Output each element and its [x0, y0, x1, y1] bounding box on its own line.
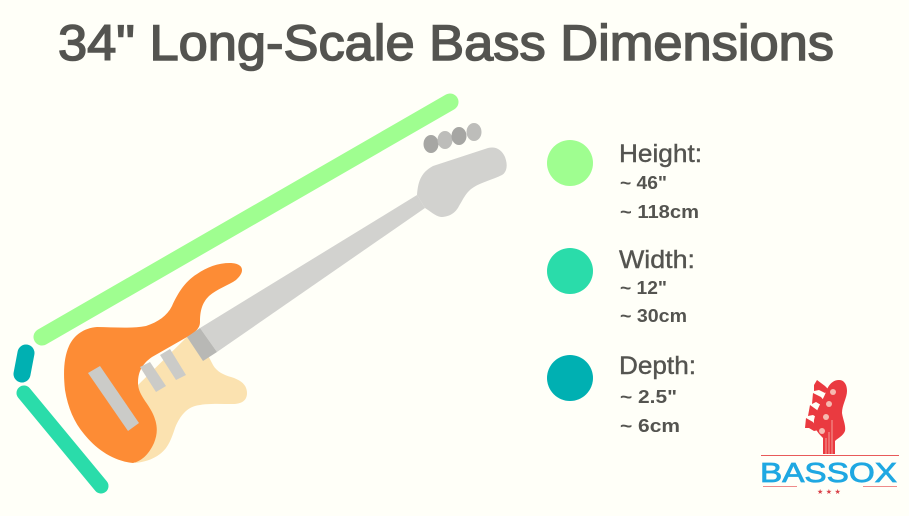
swatch [547, 355, 593, 401]
icon: bass guitar [64, 123, 507, 463]
label: Width: [619, 246, 695, 274]
tuning pegs [424, 123, 482, 153]
pickup 2 [160, 349, 186, 380]
logo headstock [814, 380, 847, 454]
label: Height: [619, 140, 702, 168]
legend: height [547, 140, 702, 222]
logo rule [761, 455, 899, 456]
neck joint [187, 328, 217, 361]
value inches: ~ 2.5" [620, 387, 677, 407]
legend: depth [547, 352, 696, 436]
value cm: ~ 6cm [620, 416, 680, 436]
value cm: ~ 30cm [620, 306, 687, 326]
value cm: ~ 118cm [620, 202, 699, 222]
pickup 3 [140, 362, 166, 392]
bar: width dimension [24, 393, 101, 486]
logo strings [826, 420, 832, 454]
logo tuners [805, 380, 829, 431]
swatch [547, 248, 593, 294]
orange body [64, 263, 242, 463]
neck [200, 195, 425, 352]
bar: depth dimension [22, 353, 26, 374]
logo lower rules [763, 486, 897, 488]
lower body [135, 337, 247, 463]
logo: Bassox [760, 380, 899, 496]
label: Depth: [619, 352, 696, 380]
logo wordmark: BASSOX [760, 457, 897, 488]
logo stars: ★★★ [817, 488, 843, 496]
value inches: ~ 46" [620, 173, 667, 193]
value inches: ~ 12" [620, 278, 667, 298]
legend: width [547, 246, 695, 326]
body pickup [88, 366, 139, 431]
swatch [547, 140, 593, 186]
logo pegs [819, 389, 836, 434]
title: 34" Long-Scale Bass Dimensions [58, 15, 834, 71]
headstock [417, 147, 507, 217]
bar: height dimension [42, 102, 450, 337]
